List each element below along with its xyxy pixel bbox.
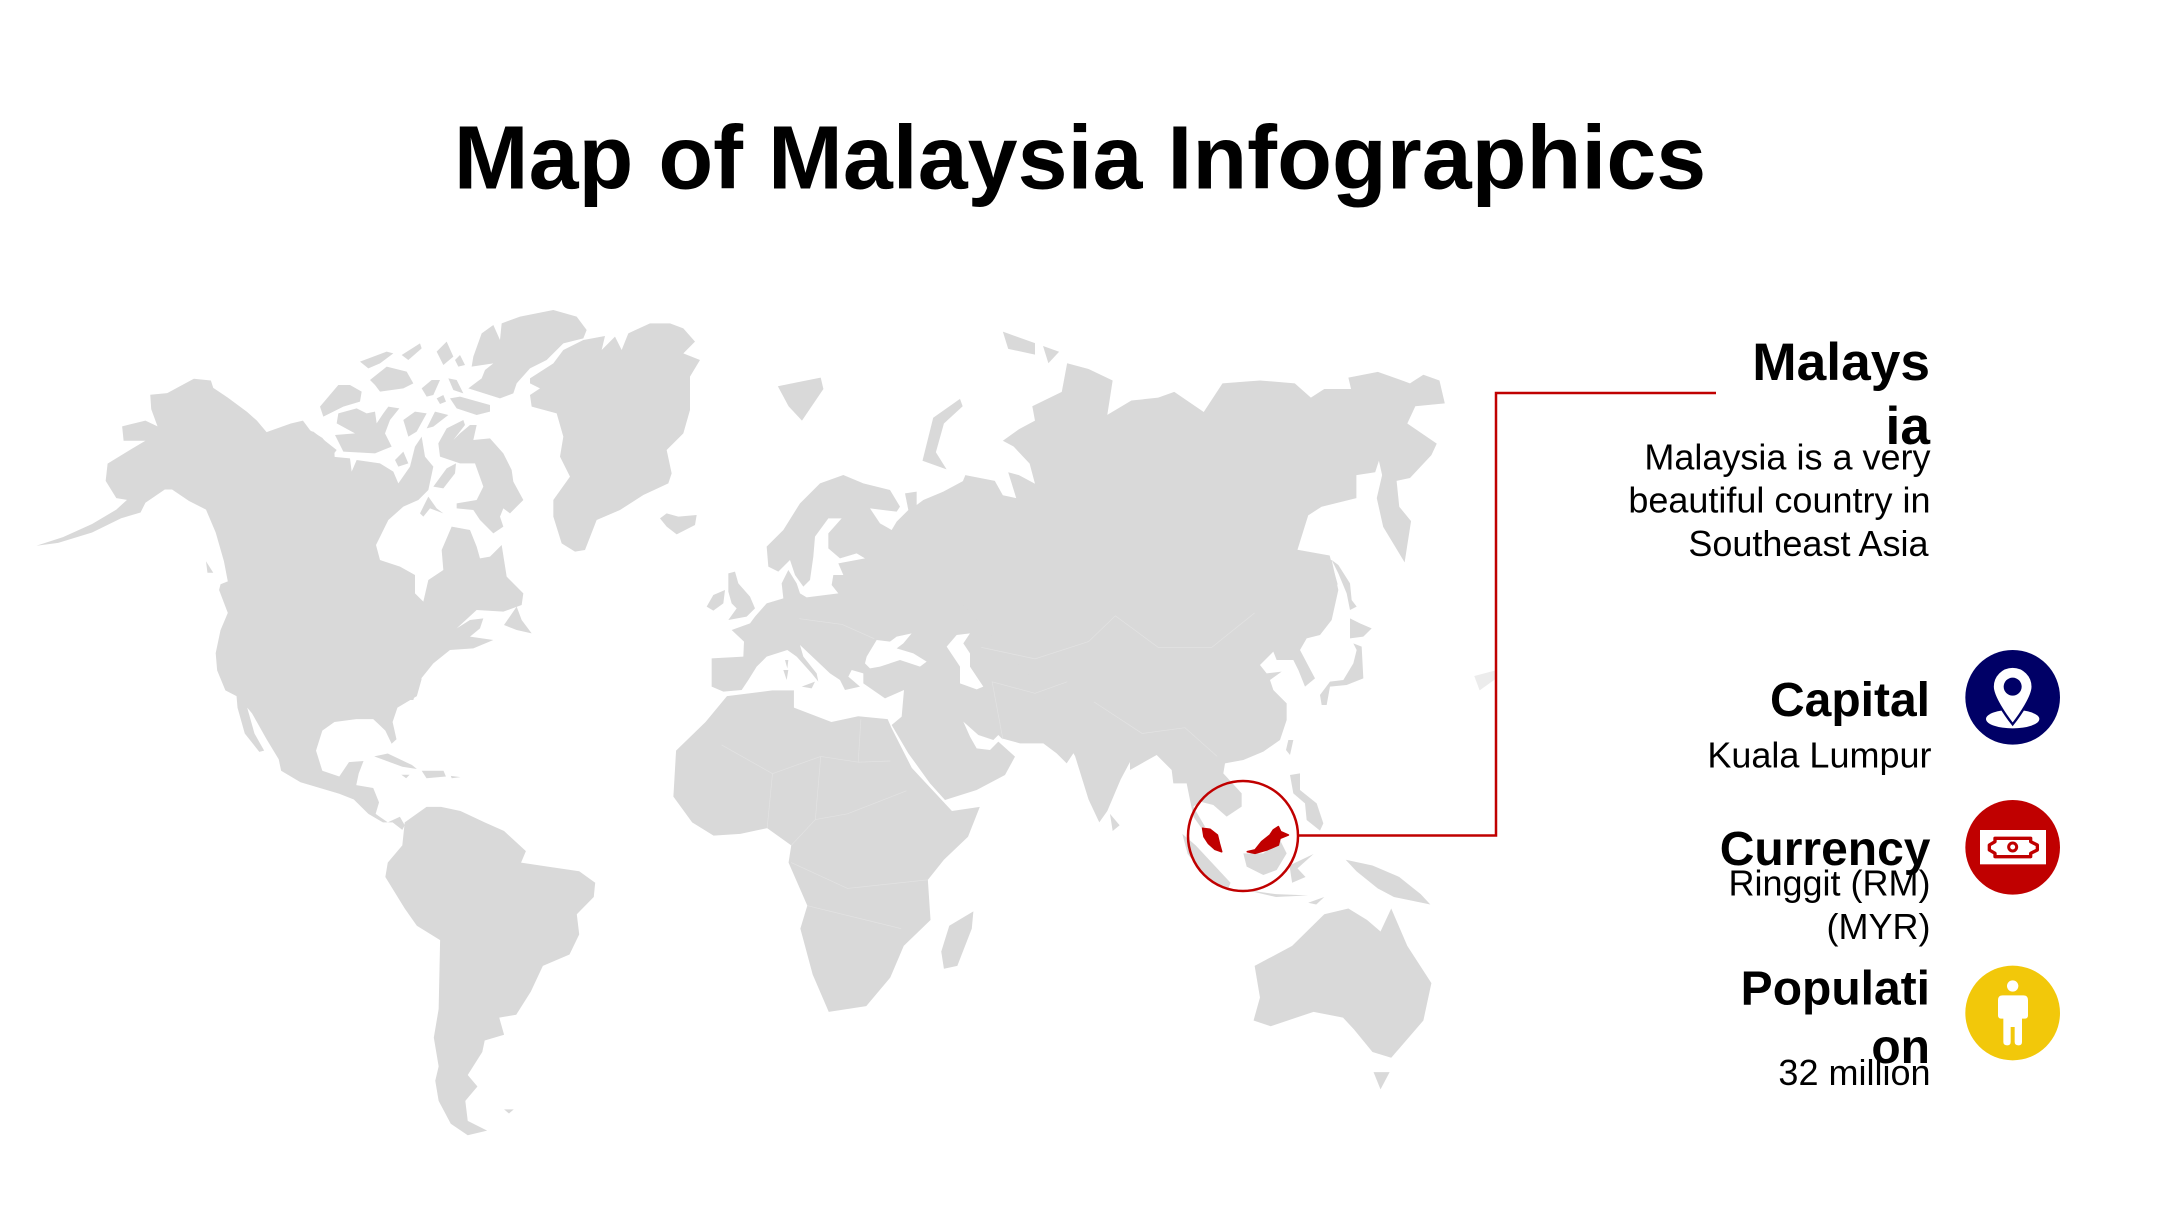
description: beautiful country in <box>1628 480 1930 520</box>
western Eurasia <box>712 475 1100 800</box>
Peninsular Malaysia <box>1203 828 1222 852</box>
map: Europe, Middle East <box>707 475 1100 800</box>
Greenland <box>530 323 700 552</box>
map: western North America and South America <box>36 379 595 1135</box>
world map <box>36 310 1496 1135</box>
value: 32 million: 32 million <box>1778 1052 1930 1093</box>
title: Map of Malaysia Infographics <box>454 108 1706 208</box>
northern and central Asia <box>928 363 1445 822</box>
Falkland Islands <box>504 1109 514 1113</box>
heading: Currency: Currency <box>1720 823 1931 876</box>
Arctic archipelago <box>320 310 587 633</box>
description: Malaysia is a very <box>1644 436 1930 478</box>
heading: Population: on <box>1871 1021 1930 1074</box>
icon: banknote <box>1965 800 2060 895</box>
East Malaysia <box>1247 827 1288 853</box>
value: Ringgit: Ringgit (RM) <box>1728 862 1930 904</box>
value: Kuala Lumpur: Kuala Lumpur <box>1707 734 1932 776</box>
country borders <box>722 613 1255 929</box>
Africa <box>673 690 980 1012</box>
Vancouver Island <box>206 561 213 573</box>
text block: Capital <box>1707 674 1932 776</box>
Malaysia highlight <box>1203 827 1288 853</box>
inland seas <box>865 633 983 689</box>
icon: location pin <box>1965 650 2060 745</box>
map: East and Southeast Asia <box>1130 560 1372 875</box>
China, Korea and Indochina <box>1130 560 1338 828</box>
Europe islands <box>707 572 815 688</box>
heading: Malaysia: ia <box>1886 397 1930 456</box>
text block: Currency <box>1720 823 1931 947</box>
icon: person <box>1965 966 2060 1060</box>
text block: Population <box>1741 962 1930 1093</box>
callout: circle around Malaysia <box>1188 781 1298 891</box>
heading: Population: Populati <box>1741 962 1930 1016</box>
Caribbean islands <box>374 754 460 778</box>
South America <box>385 807 595 1135</box>
callout line <box>1298 393 1716 836</box>
description: Southeast Asia <box>1688 523 1929 564</box>
northeast North America <box>300 430 523 700</box>
text block: Malaysia <box>1628 333 1930 564</box>
value: Ringgit: (MYR) <box>1827 906 1930 947</box>
islands <box>778 332 1430 1089</box>
map: Asia, Africa and Oceania <box>673 332 1496 1089</box>
heading: Capital: Capital <box>1770 674 1930 727</box>
New Zealand fragment <box>1474 670 1496 690</box>
heading: Malaysia: Malays <box>1752 333 1930 392</box>
East Asia islands <box>1243 560 1372 875</box>
Australia <box>1254 909 1431 1058</box>
map: Canada, Arctic islands, Greenland and Iceland <box>300 310 700 700</box>
Iceland <box>660 513 697 534</box>
North America west and south <box>36 379 422 830</box>
